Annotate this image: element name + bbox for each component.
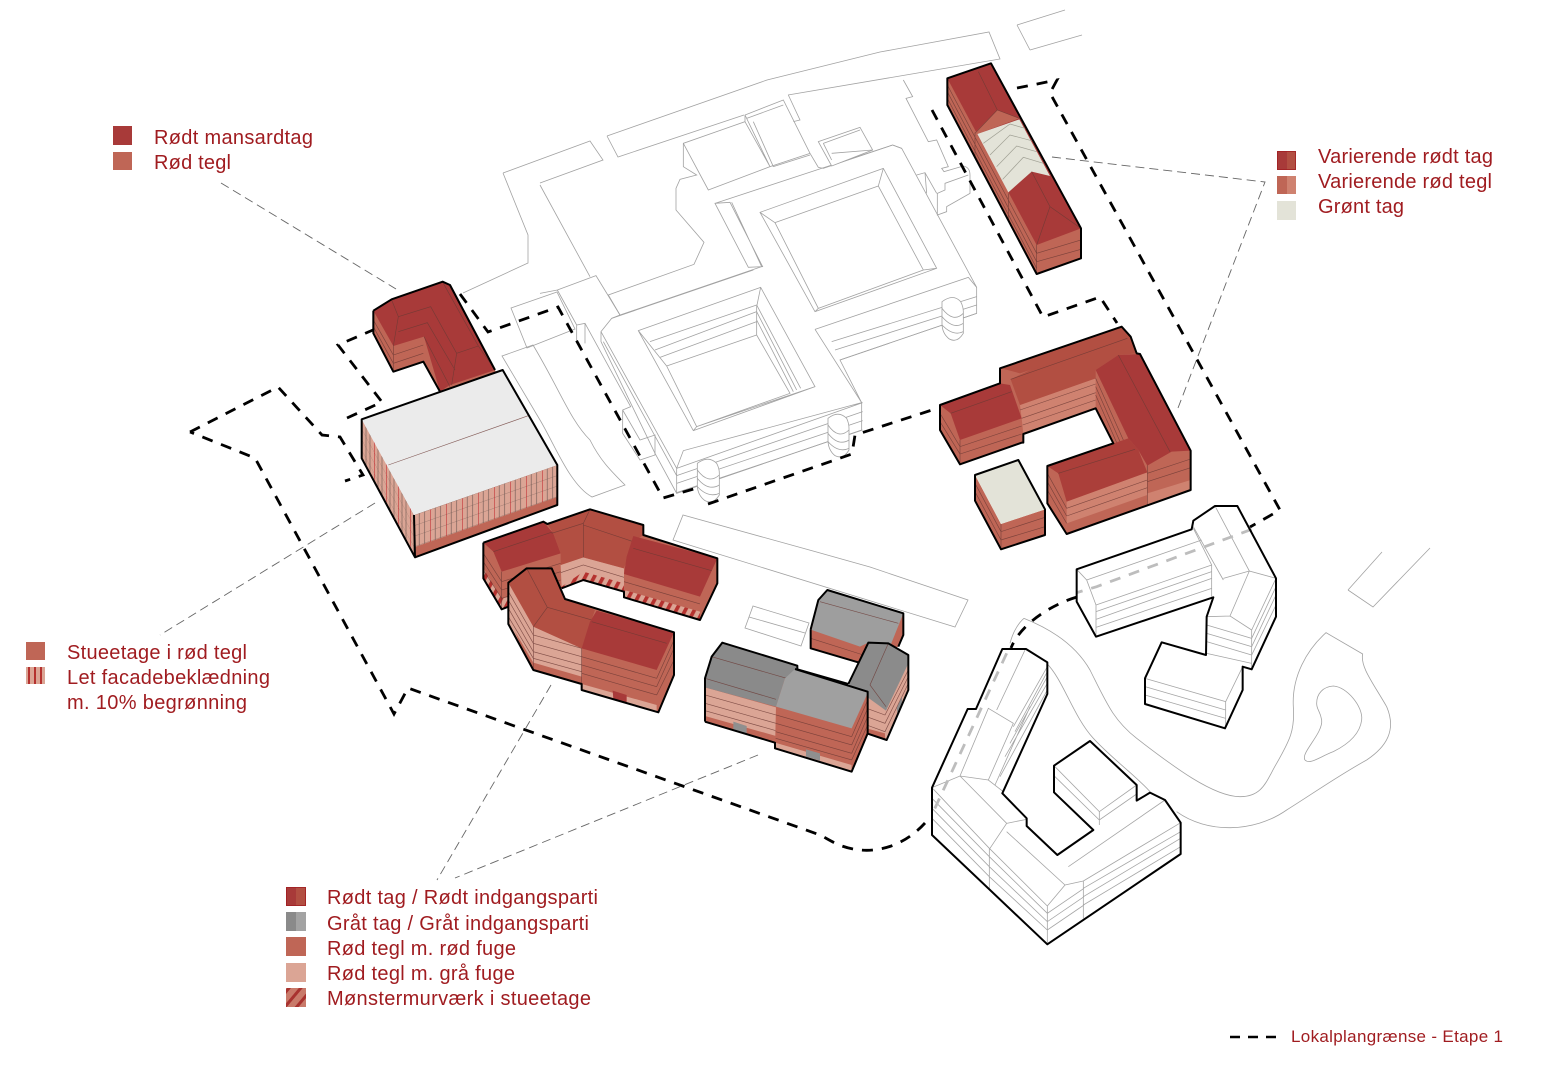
text: Let facadebeklædning: Let facadebeklædning (67, 667, 270, 689)
bottom wing facade (1067, 472, 1147, 534)
text: Rødt tag / Rødt indgangsparti: Rødt tag / Rødt indgangsparti (327, 887, 598, 909)
left facade with greening (362, 419, 415, 557)
centre roof (547, 509, 643, 568)
building: red U-shape block (483, 509, 717, 712)
swatch: patterned brickwork (286, 988, 306, 1007)
swatch: green roof (1277, 201, 1296, 220)
silhouette base (940, 327, 1191, 534)
red roof (947, 63, 1081, 245)
text: Varierende rødt tag: Varierende rødt tag (1318, 146, 1493, 168)
terrain path and pond (1010, 618, 1391, 828)
brick roof section (975, 110, 1019, 134)
small block walls (975, 475, 1045, 549)
text: Rød tegl m. grå fuge: Rød tegl m. grå fuge (327, 963, 515, 985)
text: Mønstermurværk i stueetage: Mønstermurværk i stueetage (327, 988, 591, 1010)
text: Rød tegl: Rød tegl (154, 152, 231, 174)
front wing roof left (508, 568, 595, 648)
right block grey roof (848, 643, 908, 711)
site context: roads and paths (463, 10, 1430, 646)
front block end (852, 692, 868, 772)
legend: top left (113, 126, 313, 174)
back silhouette base (483, 509, 717, 620)
grey entrance front (806, 749, 820, 761)
green roof section (977, 119, 1050, 192)
small block green roof (975, 460, 1045, 524)
text: Stueetage i rød tegl: Stueetage i rød tegl (67, 642, 247, 664)
legend: bottom (286, 887, 598, 1010)
red entrance (613, 691, 627, 702)
bottom wing roof (1047, 438, 1147, 502)
building: white neighbour upper right (1077, 506, 1276, 728)
text: Varierende rød tegl: Varierende rød tegl (1318, 171, 1492, 193)
text: Gråt tag / Gråt indgangsparti: Gråt tag / Gråt indgangsparti (327, 913, 589, 935)
centre facade (561, 557, 624, 592)
end facade lines (1037, 240, 1081, 274)
front block grey roof (776, 669, 868, 728)
swatch: red brick (113, 152, 132, 170)
bottom wing end lines (1047, 473, 1067, 523)
front wing roof right (582, 611, 674, 670)
text: Lokalplangrænse - Etape 1: Lokalplangrænse - Etape 1 (1291, 1027, 1503, 1046)
swatch: ground floor brick (26, 642, 45, 660)
grey roof (362, 370, 557, 515)
centre wing roof (1011, 327, 1137, 405)
roof and courtyard lines (601, 267, 863, 493)
back left wing roof (483, 522, 561, 572)
swatch: varied red roof (1277, 151, 1296, 170)
building: hall with light facade (362, 370, 557, 557)
building: red mansard roof, top left (373, 282, 497, 392)
left and front block base (705, 643, 868, 772)
stair tower front left (697, 459, 719, 502)
legend: top right (1277, 146, 1493, 220)
legend: left (26, 642, 270, 714)
swatch: red roof (286, 887, 306, 906)
text: Rødt mansardtag: Rødt mansardtag (154, 127, 313, 149)
right wing roof (1096, 354, 1191, 466)
right block base (848, 643, 908, 740)
right wing roof (624, 536, 717, 597)
swatch: grey roof (286, 912, 306, 931)
dashed line sample (1230, 1036, 1277, 1038)
building: right red U-shape block with small green roof block (940, 327, 1191, 549)
swatch: light facade cladding (26, 667, 45, 684)
building: white neighbour lower right (932, 649, 1181, 944)
inner wall lines (1096, 378, 1123, 443)
front facade with greening (414, 465, 557, 547)
swatch: red brick red joint (286, 937, 306, 956)
right wing facade (624, 574, 700, 620)
text: Rød tegl m. rød fuge: Rød tegl m. rød fuge (327, 938, 516, 960)
front wing facade right (582, 648, 657, 712)
leader lines (160, 157, 1265, 880)
centre wing facade (1020, 378, 1096, 434)
grey entrance left (733, 722, 747, 733)
front brick base (414, 465, 557, 557)
mansard roof (373, 282, 495, 392)
back block grey roof (812, 590, 903, 647)
main building massing (601, 100, 977, 493)
swatch: red brick grey joint (286, 963, 306, 982)
stair tower back (942, 297, 963, 340)
boundary over building (933, 653, 1007, 812)
long brick facade (947, 63, 1081, 274)
building: grey roof block (705, 590, 908, 772)
front wing end (657, 632, 674, 712)
left block facade (705, 687, 776, 743)
text: m. 10% begrønning: m. 10% begrønning (67, 692, 247, 714)
building: top right long block with green roof (947, 63, 1081, 274)
context: existing main building (540, 80, 977, 502)
swatch: varied red brick (1277, 176, 1296, 194)
boundary over building (1077, 529, 1252, 593)
left block grey roof (705, 643, 797, 707)
back block base (811, 590, 903, 663)
right wing end (700, 558, 717, 620)
front wing left facade (508, 583, 582, 684)
Lokalplangrænse dashed boundary (190, 80, 1280, 850)
front block facade (775, 707, 852, 772)
brick wall lines (373, 320, 423, 372)
silhouette base (373, 282, 497, 392)
stair tower front right (828, 414, 849, 457)
back left wing wall (483, 568, 510, 609)
text: Grønt tag: Grønt tag (1318, 196, 1404, 218)
right wing end wall (1147, 480, 1191, 505)
front silhouette base (508, 568, 674, 712)
swatch: red mansard roof (113, 126, 132, 145)
left block roof (940, 383, 1022, 440)
